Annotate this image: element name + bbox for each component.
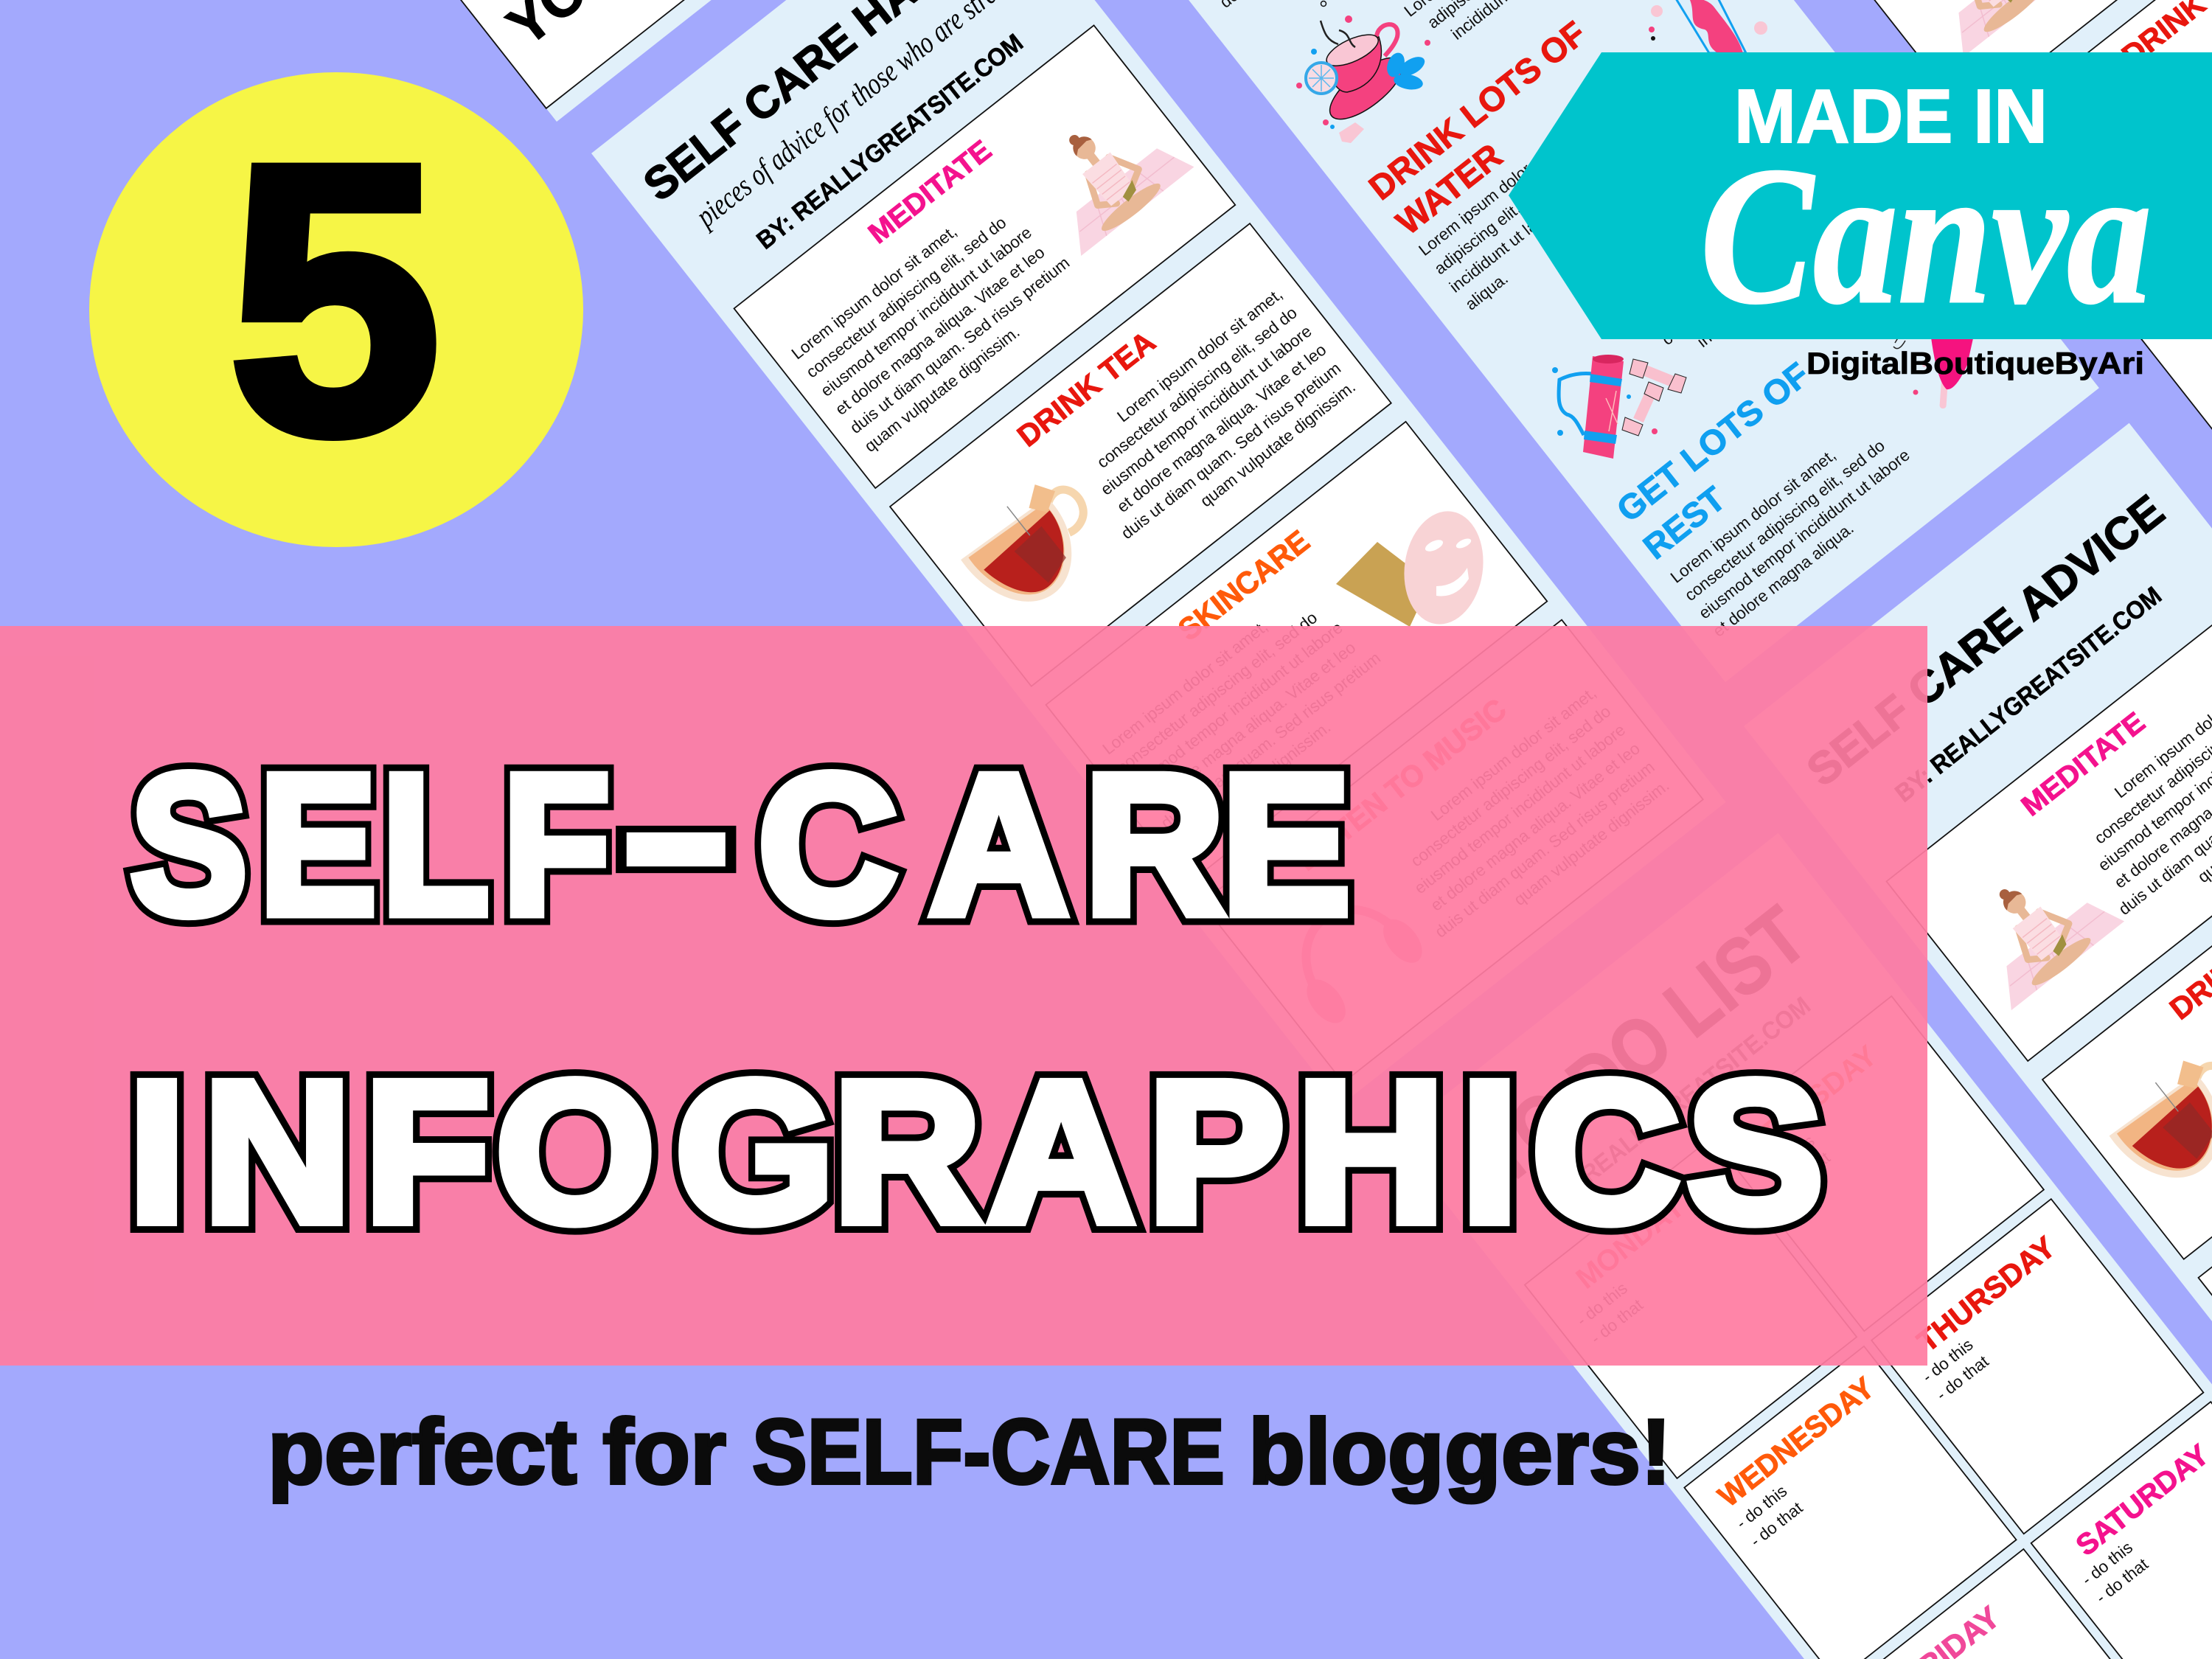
card: third (2138, 41, 2212, 514)
body text beside cup (1401, 0, 1674, 58)
page byline: BY: REALLYGREATSITE.COM (751, 29, 1029, 255)
icon: bottle (1649, 0, 1767, 53)
body text: et dolore magna aliqua. Vitae et leo (832, 243, 1048, 419)
body text (788, 179, 1088, 456)
body text: duis ut diam quam. Sed risus pretium (1158, 649, 1384, 832)
body text: consectetur adipiscing elit, sed do (803, 213, 1009, 381)
body text: Lorem ipsum dolor sit amet, (1427, 684, 1600, 824)
title: self-care infographics: INFOGRAPHICS (128, 1040, 1823, 1264)
card: listen to music (1202, 620, 1703, 1082)
heading: listen to music: LISTEN TO MUSIC (1290, 692, 1513, 877)
panel: top right page (1696, 0, 2212, 584)
card: thursday: THURSDAY (1911, 1230, 2062, 1359)
title: self-care infographics: SELF (131, 733, 610, 956)
tagline: SELF-CARE (752, 1401, 1225, 1503)
card: meditate (1826, 0, 2212, 118)
body text: Lorem ipsum dolor sit amet, (1113, 285, 1286, 425)
panel: self care habits page (591, 0, 1726, 1105)
tagline (268, 1401, 1672, 1503)
card: skincare (1046, 422, 1547, 885)
icon: face mask packet (1336, 542, 1430, 627)
card: wednesday: WEDNESDAY (1712, 1371, 1880, 1513)
body text: rest: Lorem ipsum dolor sit amet, (1667, 445, 1840, 587)
body text: quam vulputate dignissim. (1511, 776, 1672, 909)
panel: partial page top left (329, 0, 905, 122)
body text: et dolore magna aliqua. Vitae et leo (1427, 739, 1644, 915)
title: self-care infographics: CARE (758, 734, 1350, 956)
body text: consectetur adipiscing elit, sed do (1113, 608, 1321, 776)
tagline: perfect for (268, 1401, 726, 1503)
card: tuesday: - do that (1775, 1148, 1834, 1200)
body text (1099, 574, 1399, 851)
page title: SELF CARE ADVICE (1798, 485, 2173, 796)
body text: duis ut diam quam. Sed risus pretium (1118, 359, 1344, 543)
card: monday: MONDAY (1570, 1190, 1691, 1295)
body text: rest (1667, 410, 1927, 641)
title: self-care infographics: INFOGRAPHICS (128, 1040, 1823, 1264)
card: drink tea (1982, 0, 2212, 316)
body text: et dolore magna aliqua. Vitae et leo (1113, 341, 1329, 516)
title: self-care infographics: SELF (131, 733, 610, 956)
page title: TO DO LIST (1460, 889, 1823, 1203)
card: wednesday (1684, 1346, 2017, 1659)
card: thursday (1871, 1199, 2203, 1534)
card: tuesday (1712, 996, 2044, 1331)
body text: et dolore magna aliqua. Vitae et leo (1143, 638, 1359, 814)
body text: water (1415, 62, 1703, 316)
icon: cup of tea (953, 469, 1116, 626)
card: meditate (734, 25, 1235, 488)
body text: eiusmod tempor incididunt ut labore (1411, 720, 1629, 897)
title: self-care infographics: - (622, 722, 730, 944)
body text: eiusmod tempor incididunt ut labore (1128, 618, 1346, 796)
panel: to do list page (1393, 833, 2212, 1659)
card: friday (1844, 1549, 2176, 1659)
body text: eiusmod tempor incididunt ut labore (817, 223, 1035, 400)
card: drink tea (2042, 796, 2212, 1259)
made in label: MADE IN (1734, 74, 2048, 159)
panel: self care advice page (1744, 423, 2212, 1596)
body text: consectetur adipiscing elit, sed do (1093, 303, 1301, 472)
body text (1060, 285, 1359, 561)
card: drink tea (890, 223, 1391, 686)
badge: yellow circle (89, 72, 583, 547)
body text: quam vulputate dignissim. (861, 323, 1023, 456)
icon: sheet face mask (1397, 506, 1490, 630)
icon: popsicle (1893, 332, 1975, 408)
card: saturday (2031, 1402, 2212, 1659)
body text: water: adipiscing elit, sed do eiusmod tempor (1431, 89, 1664, 278)
body text: water: aliqua. (1461, 269, 1512, 314)
page byline: BY: REALLYGREATSITE.COM (1890, 582, 2167, 807)
body text under ribbon: incididunt ut labore et dolore (1694, 207, 1869, 351)
card: thursday: - do that (1933, 1352, 1992, 1404)
icon: headphones (1273, 880, 1430, 1030)
body text: quam vulputate dignissim. (1197, 378, 1359, 510)
body text: rest: eiusmod tempor incididunt ut labore (1695, 445, 1913, 622)
card: saturday: SATURDAY (2070, 1439, 2212, 1562)
card: monday: - do that (1587, 1295, 1647, 1348)
card: wednesday: - do that (1747, 1498, 1806, 1551)
heading: skincare: SKINCARE (1172, 524, 1316, 647)
body text: eiusmod tempor incididunt ut labore (1097, 321, 1315, 499)
body text under ribbon: consectetur adipiscing elit (1658, 217, 1819, 349)
body text: Lorem ipsum dolor sit amet, (788, 222, 960, 363)
page byline: BY: REALLYGREATSITE.COM (1540, 992, 1816, 1217)
heading: drink lots of water: WATER (1388, 136, 1509, 242)
card: tuesday: - do this (1760, 1132, 1818, 1183)
body text: duis ut diam quam. Sed risus pretium (846, 254, 1073, 437)
icon: cup with lemon and mint (1296, 1, 1430, 143)
heading: meditate: MEDITATE (863, 134, 998, 250)
number 5: 5 (229, 86, 441, 512)
body text: rest: consectetur adipiscing elit, sed do (1681, 437, 1888, 605)
icon: meditating woman (1019, 88, 1194, 257)
heading: drink tea: DRINK TEA (1011, 324, 1161, 453)
card: saturday: - do that (2093, 1554, 2152, 1607)
body text (1373, 684, 1672, 960)
card: meditate: MEDITATE (2016, 706, 2152, 822)
card: monday (1525, 1144, 1857, 1478)
icon: meditating woman (1902, 0, 2077, 58)
card: meditate (1887, 598, 2212, 1061)
card: wednesday: - do this (1733, 1481, 1790, 1532)
icon: meditating woman (1950, 843, 2125, 1011)
body text under ribbon (1658, 189, 1869, 367)
body text: quam vulputate dignissim. (1172, 717, 1334, 851)
heading: get lots of rest: REST (1635, 479, 1733, 566)
card: monday: - do this (1573, 1279, 1631, 1329)
card: third (2199, 995, 2212, 1458)
heading: get lots of rest: GET LOTS OF (1609, 355, 1816, 529)
title: self-care infographics (128, 722, 1823, 1264)
card: thursday: - do this (1919, 1335, 1977, 1386)
title: self-care infographics: CARE (758, 734, 1350, 956)
tagline: bloggers! (1248, 1401, 1672, 1503)
body text: water: Lorem ipsum dolor sit amet, consectetur (1415, 62, 1659, 260)
icon: yoga mat and dumbbells (1552, 355, 1686, 459)
panel: drink lots of water page (1087, 0, 2099, 682)
panel: pink title band (0, 626, 1927, 1366)
body text: water: incididunt ut labore et dolore magna (1446, 119, 1665, 296)
icon: cup of tea (2101, 1045, 2212, 1202)
body text: consectetur adipiscing elit, sed do (1407, 702, 1614, 870)
heading: drink lots of water: DRINK LOTS OF (1361, 13, 1593, 207)
title: self-care infographics: - (622, 722, 730, 944)
credit: DigitalBoutiqueByAri (1806, 346, 2144, 380)
ribbon: made in canva (1509, 52, 2212, 344)
body text: rest: et dolore magna aliqua. (1709, 519, 1857, 641)
body text: duis ut diam quam. Sed risus pretium (1431, 757, 1658, 942)
canva wordmark: Canva (1700, 126, 2152, 344)
card: tuesday: TUESDAY (1754, 1039, 1883, 1150)
card: saturday: - do this (2079, 1538, 2136, 1589)
body text: Lorem ipsum dolor sit amet, (1099, 617, 1271, 758)
